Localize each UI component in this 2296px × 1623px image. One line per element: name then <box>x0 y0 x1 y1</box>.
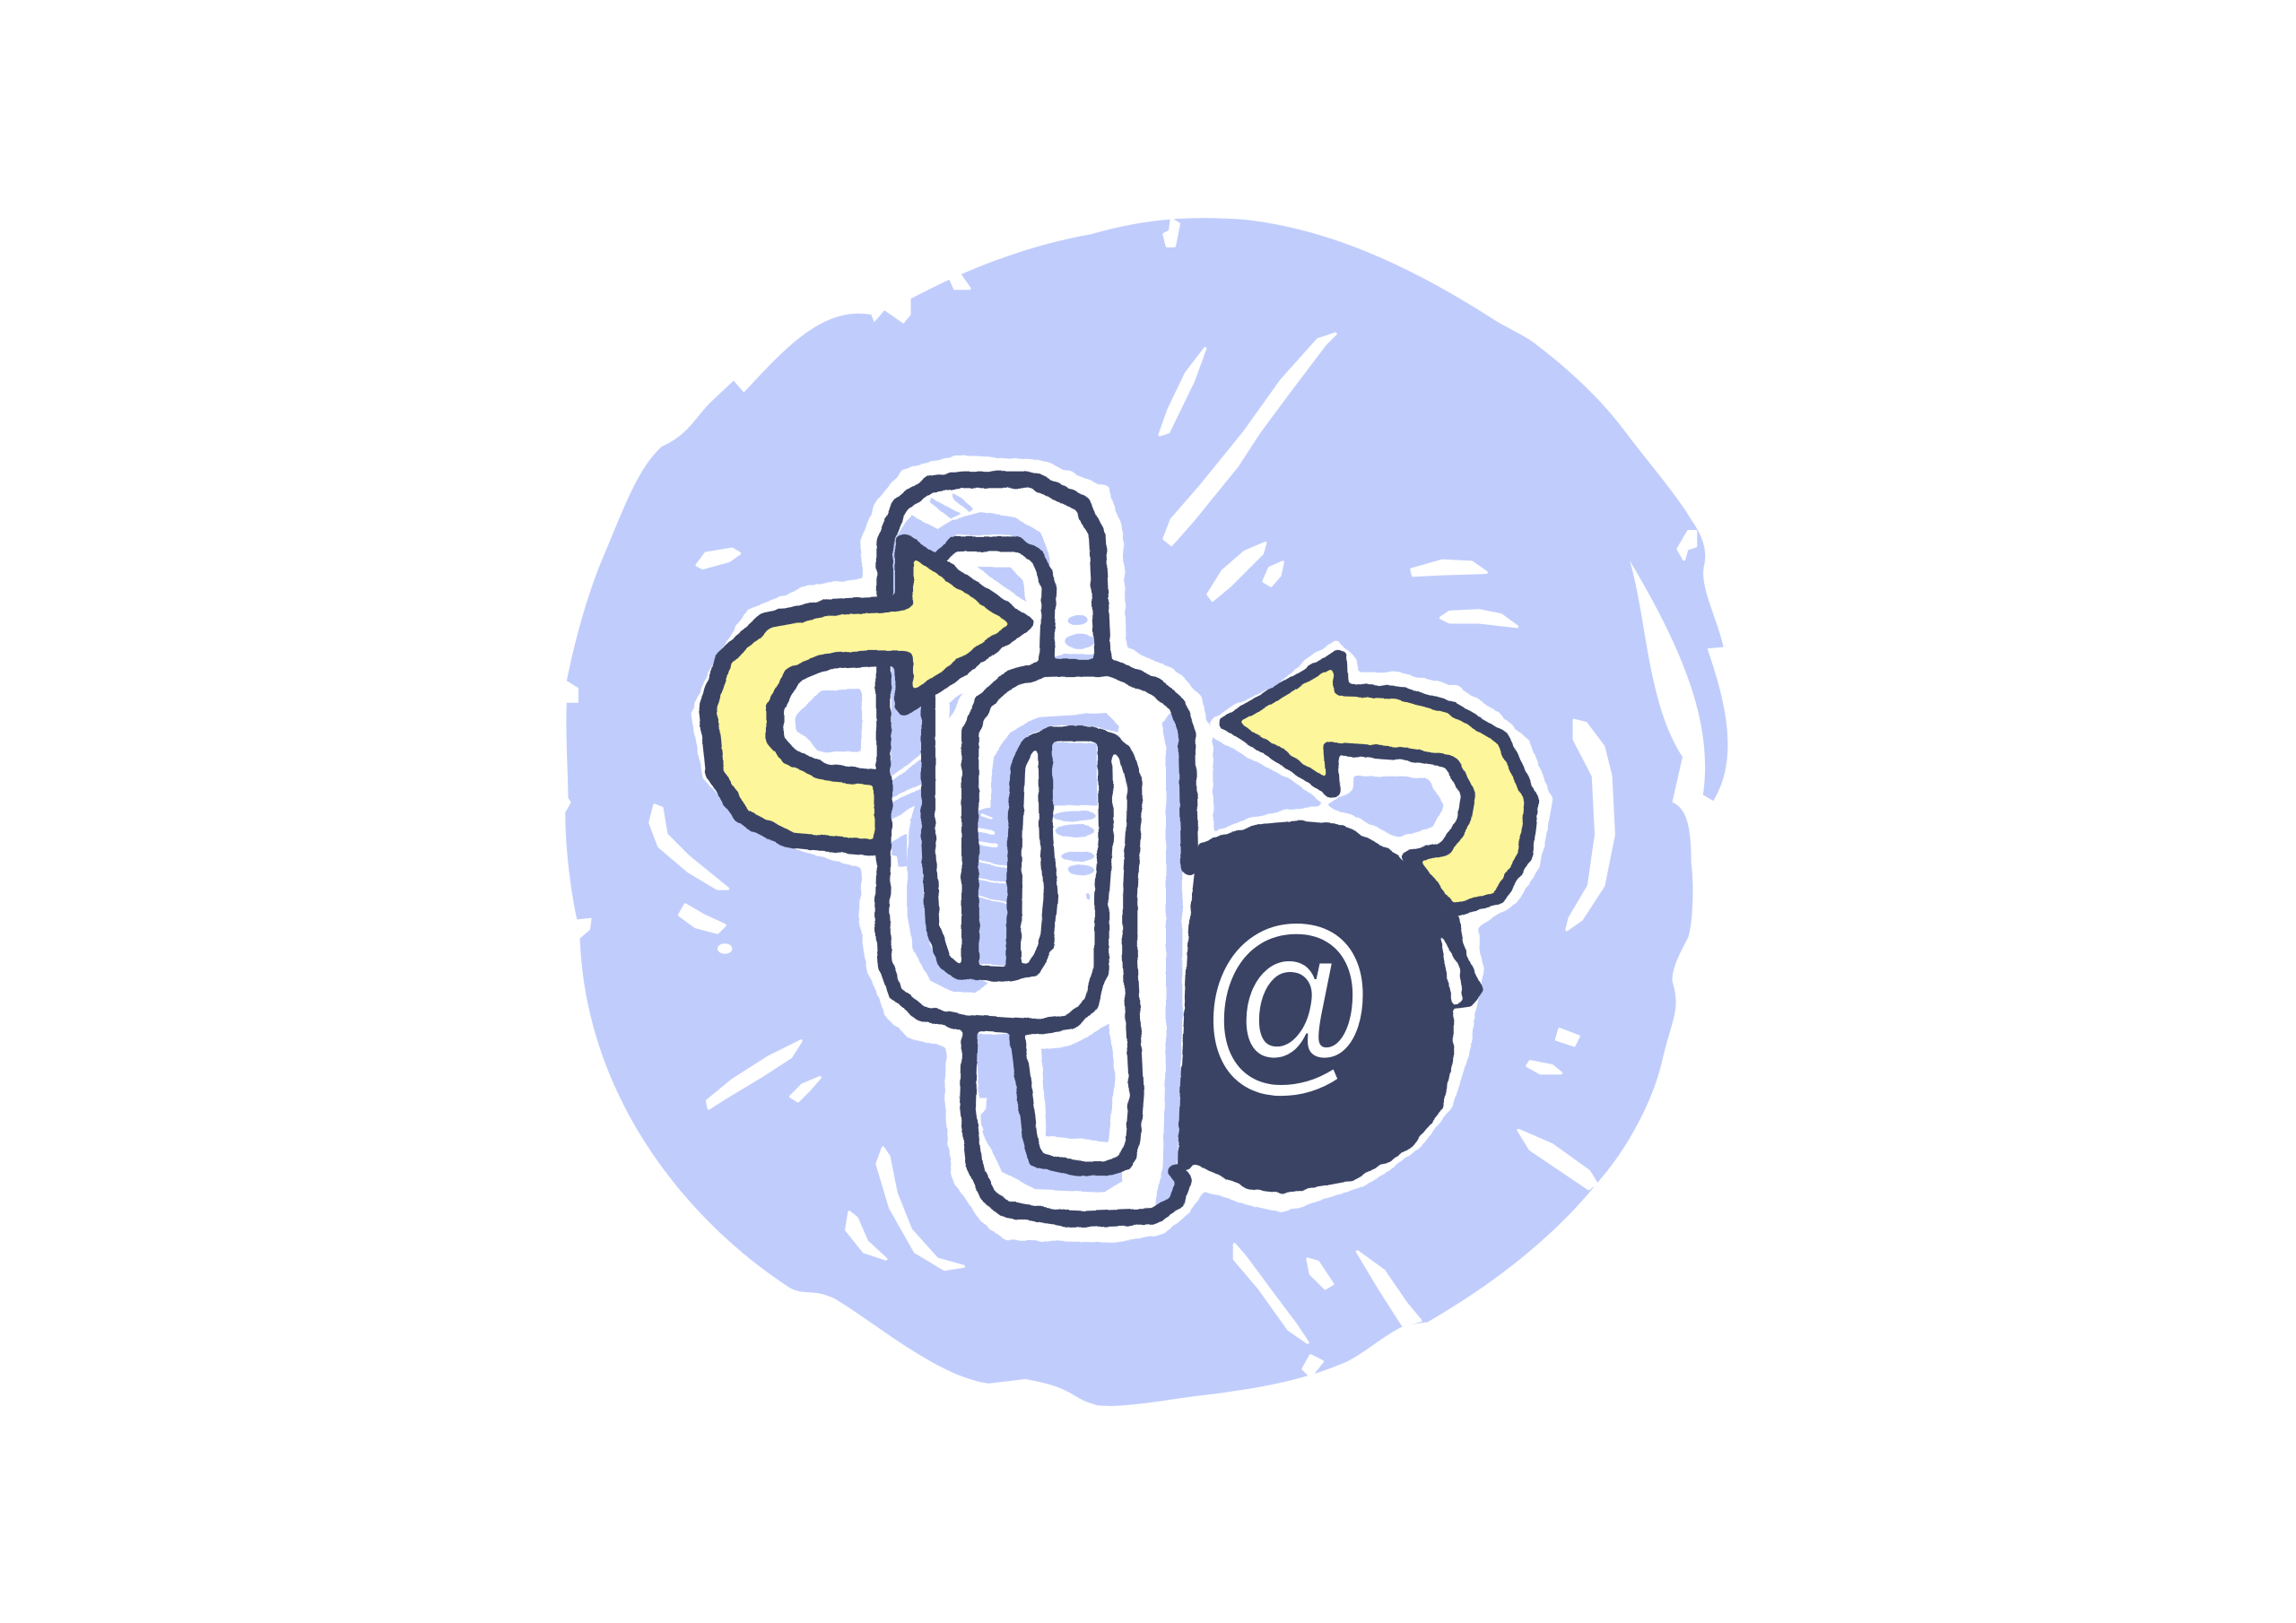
blue window inside right arrow loop <box>1325 776 1445 838</box>
main figure <box>691 455 1552 1243</box>
blue window inside left arrow loop <box>796 689 862 752</box>
white brush marks around the blob <box>650 220 1696 1376</box>
arrow: left yellow arrow pointing right <box>708 542 1024 849</box>
white sticker outline <box>691 455 1552 1243</box>
icon: navy email ball <box>1178 820 1483 1193</box>
arrow: right yellow arrow pointing left <box>1225 655 1532 911</box>
paperclip navy lines <box>882 480 1190 1219</box>
blue windows inside the paperclip <box>890 493 1182 1213</box>
icon: at sign on the ball: @ <box>1199 886 1378 1112</box>
blue blob background <box>565 218 1727 1406</box>
